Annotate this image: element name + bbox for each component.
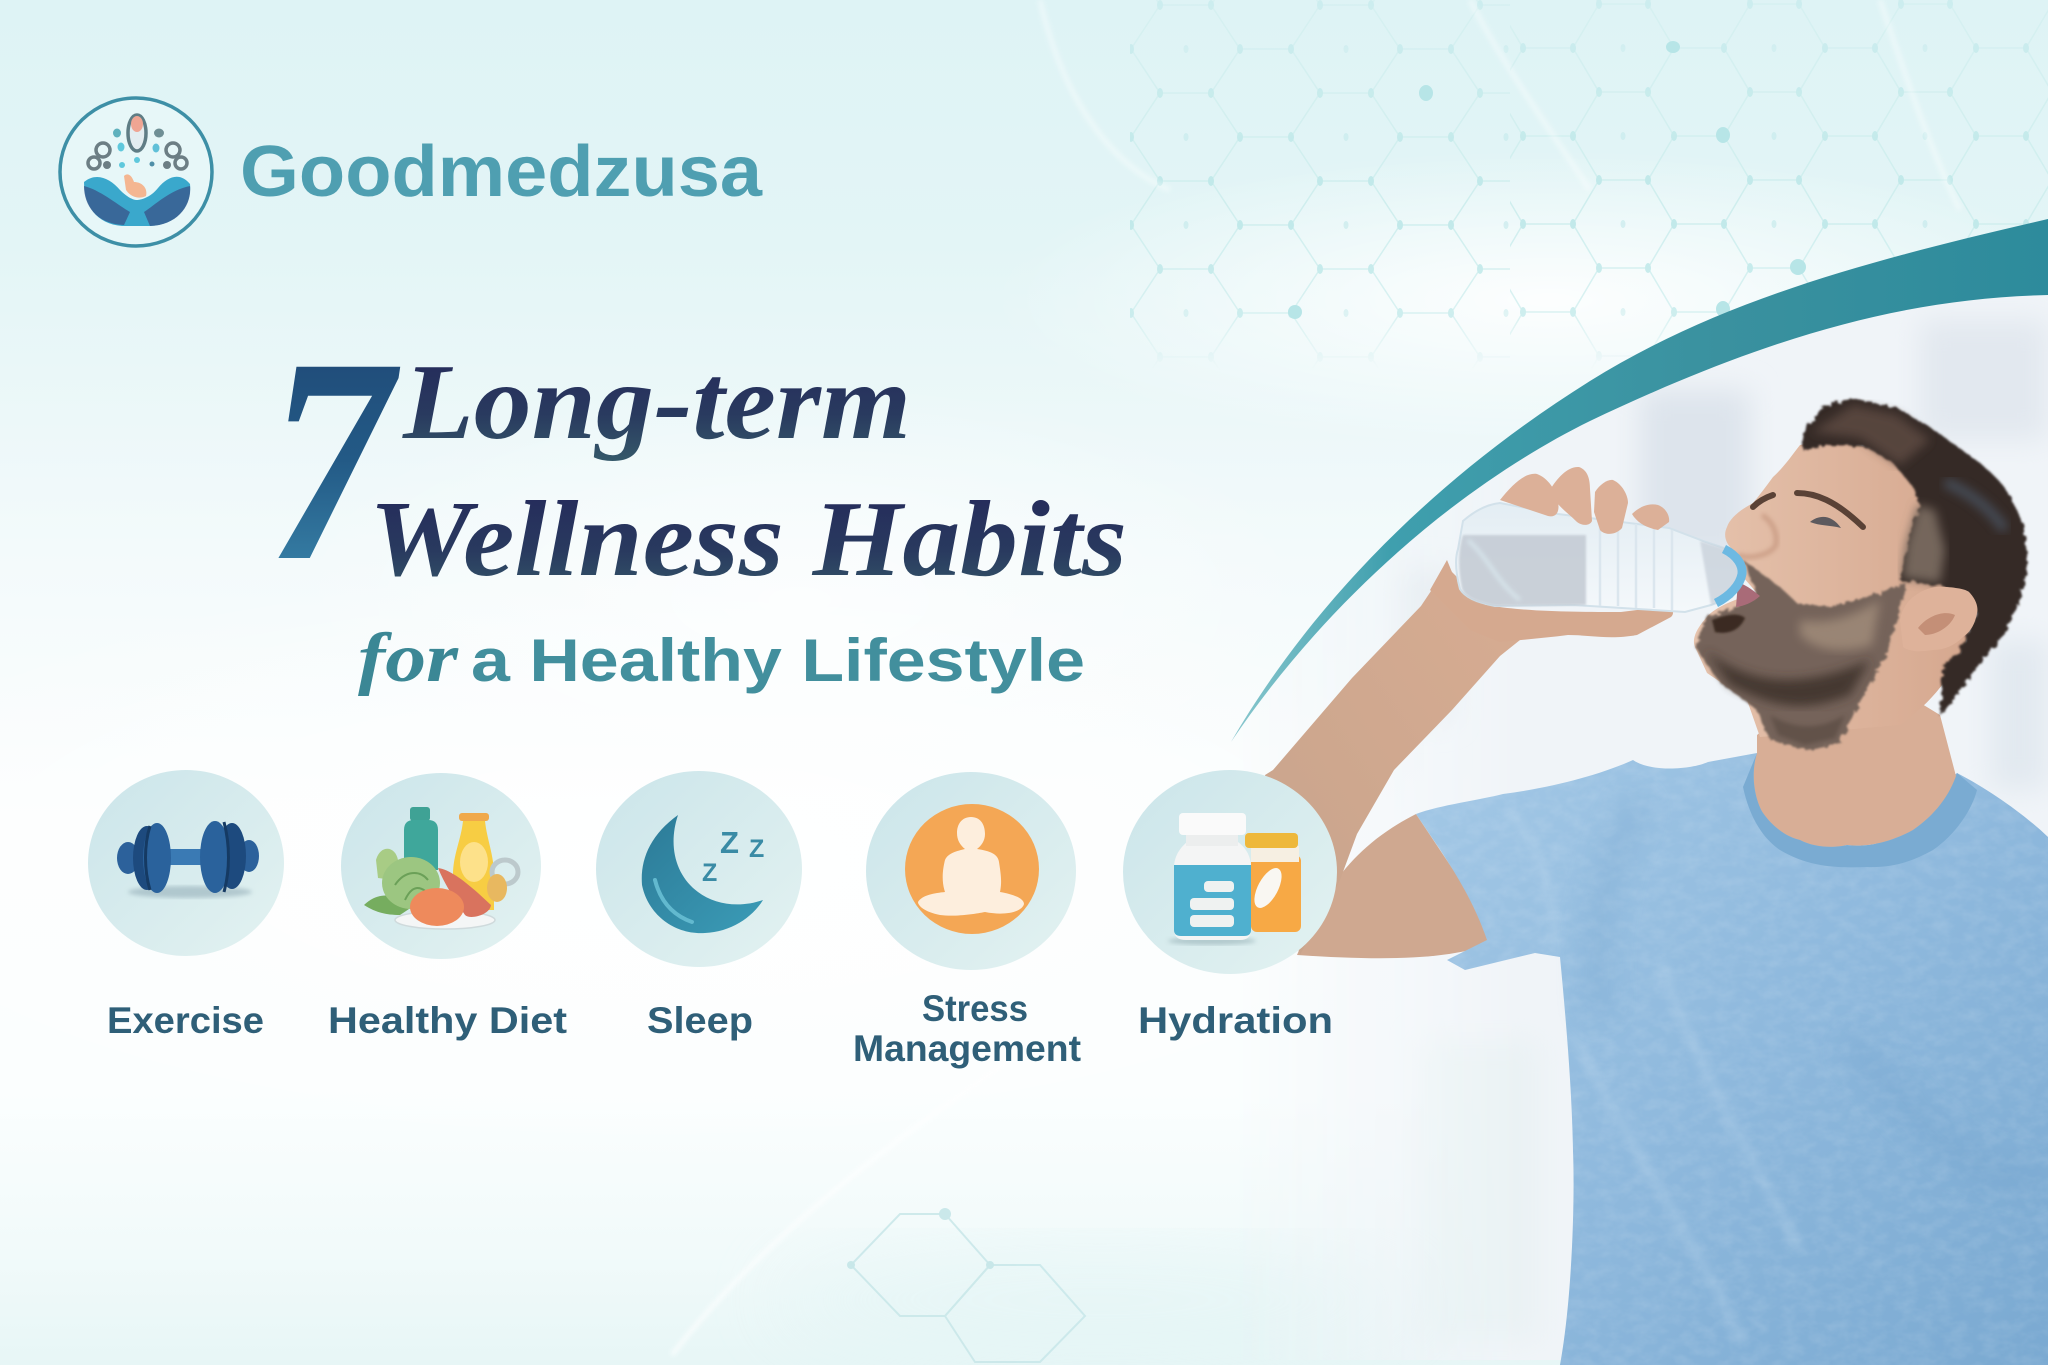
icon: sleep z letters: Z: [702, 859, 717, 887]
habit: healthy diet: [328, 773, 567, 1041]
hexagon network top right: [1040, 0, 2048, 370]
icon: meditating figure: [918, 817, 1024, 916]
bottle neck: [1700, 541, 1743, 605]
hand palm and thumb: [1430, 560, 1673, 642]
bottle crinkles: [1468, 540, 1520, 600]
icon: bottles: [1168, 813, 1301, 945]
icon: dumbbell: [117, 821, 259, 898]
stress label: Stress: [922, 988, 1028, 1029]
icon: orange disc: [905, 804, 1039, 934]
bottle ribs: [1600, 520, 1672, 610]
hair: [1803, 398, 2027, 717]
eye: [1810, 517, 1841, 528]
hydration circle: [1123, 770, 1337, 974]
title: [268, 299, 1127, 697]
man drinking water: [1265, 398, 2048, 1365]
exercise circle: [88, 770, 284, 956]
shirt texture: [1416, 753, 2048, 1365]
fingers: [1500, 467, 1669, 534]
hexagon network bottom: [847, 1208, 1085, 1362]
head: [1694, 398, 2027, 750]
far eyebrow: [1753, 495, 1773, 507]
shirt collar: [1743, 753, 1977, 867]
neck: [1754, 660, 1957, 847]
habit: exercise: [88, 770, 284, 1041]
ear: [1900, 587, 1977, 651]
water bottle: [1456, 503, 1743, 612]
logo emblem: [60, 98, 212, 246]
mouth: [1736, 582, 1760, 607]
stress label: Management: [853, 1028, 1081, 1069]
soft light streak: [672, 1060, 1010, 1355]
habit: sleep: [596, 771, 802, 1041]
icon: crescent moon: [642, 815, 763, 933]
exercise label: Exercise: [107, 1000, 264, 1041]
diet label: Healthy Diet: [328, 1000, 567, 1041]
dark beard band: [1705, 650, 1870, 706]
stress label: [853, 988, 1081, 1069]
hair highlight: [1945, 482, 2005, 530]
hair top brown tone: [1812, 405, 1930, 465]
light beard tone: [1800, 600, 1880, 650]
diet circle: [341, 773, 541, 959]
icon: sleep z letters: Z: [720, 825, 739, 860]
big numeral 7: 7: [268, 299, 404, 622]
beard: [1695, 560, 1907, 750]
forearm: [1265, 567, 1520, 955]
face: [1694, 442, 1975, 737]
bottle water shadow: [1459, 535, 1586, 606]
shirt folds: [1510, 810, 1800, 1340]
habit: hydration: [1123, 770, 1337, 1041]
t-shirt: [1416, 753, 2048, 1365]
near eyebrow: [1797, 493, 1863, 527]
subtitle: for: [358, 620, 459, 697]
subtitle: [358, 620, 1085, 697]
subtitle: a Healthy Lifestyle: [471, 627, 1085, 694]
hydration label: Hydration: [1138, 1000, 1333, 1041]
logo: [60, 98, 763, 246]
upper arm: [1297, 814, 1500, 958]
logo wordmark: Goodmedzusa: [240, 132, 763, 212]
stress circle: [866, 772, 1076, 970]
hair faded side: [1902, 505, 1945, 583]
curved teal swoosh: [1231, 219, 2048, 742]
icon: sleep z letters: Z: [749, 835, 764, 863]
icon: sleep z letters: [702, 825, 764, 887]
sleep label: Sleep: [647, 1000, 753, 1041]
title line 1: Long-term: [402, 343, 911, 462]
icon: food plate: [364, 807, 518, 929]
sleep circle: [596, 771, 802, 967]
bottle cap: [1716, 549, 1742, 603]
title line 2: Wellness Habits: [369, 480, 1127, 599]
photo backdrop: blurred buildings: [1400, 296, 2048, 1360]
nose shading: [1738, 515, 1776, 557]
habit: stress management: [853, 772, 1081, 1069]
